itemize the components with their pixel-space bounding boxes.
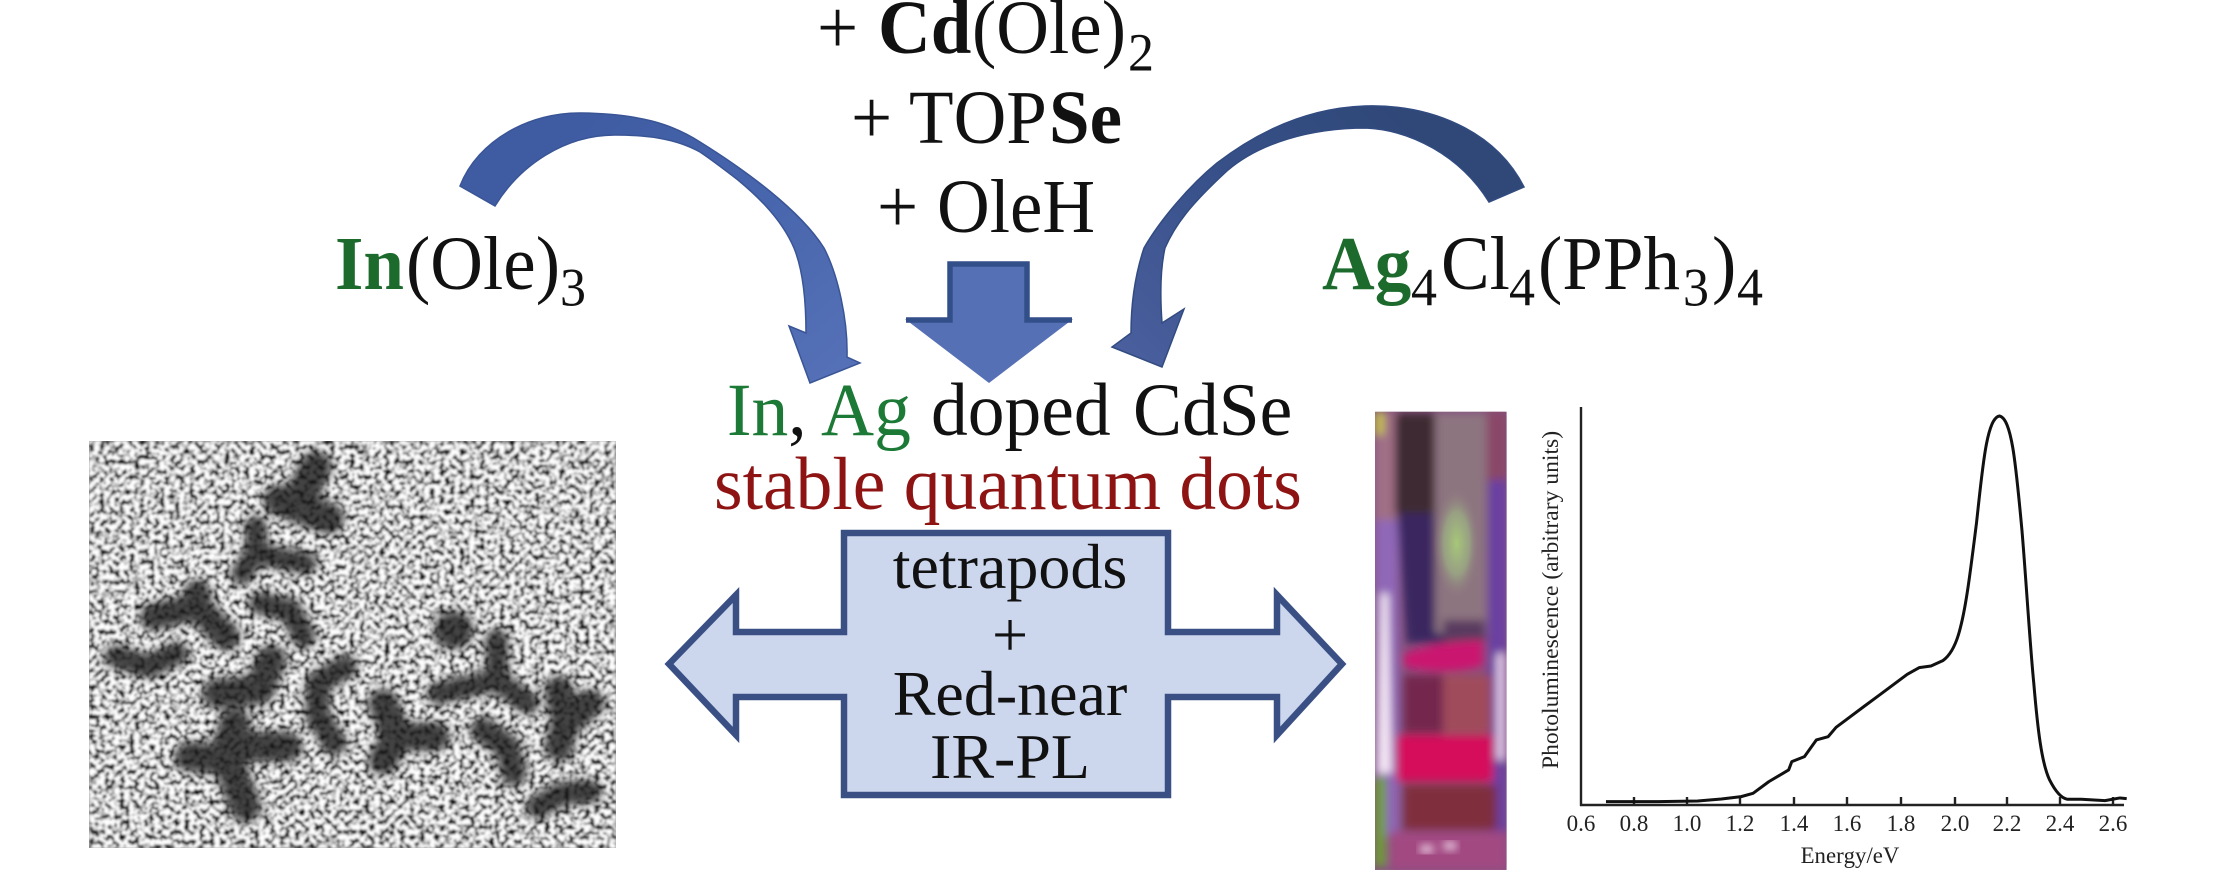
reagent: OleH: OleH — [937, 166, 1095, 249]
x tick labels: 1.8 — [1887, 811, 1915, 836]
reagent: TOPSe: TOP — [909, 77, 1047, 160]
text: Ag4Cl4(PPh3)4 precursor: ) — [1712, 223, 1736, 306]
reagent: TOPSe: + — [851, 77, 892, 160]
text: In(Ole)3 precursor: In — [335, 223, 404, 306]
text: In(Ole)3 precursor: (Ole) — [406, 223, 560, 306]
reagent: TOPSe: Se — [1049, 77, 1122, 160]
heading: doped CdSe: In — [727, 369, 788, 452]
spectrum curve — [1606, 416, 2127, 802]
callout text — [893, 531, 1127, 792]
reagent: Cd(Ole)2: 2 — [1128, 24, 1154, 83]
arrow: Ag4Cl4(PPh3)4 curved arrow — [1112, 106, 1524, 367]
x tick labels: 1.6 — [1833, 811, 1861, 836]
text: Ag4Cl4(PPh3)4 precursor: 4 — [1411, 259, 1437, 318]
y axis — [1580, 407, 1582, 806]
callout text: + — [992, 599, 1028, 670]
double arrow shape — [669, 533, 1342, 795]
callout text: IR-PL — [930, 721, 1090, 792]
panel: TEM micrograph of tetrapods — [89, 441, 616, 848]
text: Ag4Cl4(PPh3)4 precursor: 4 — [1509, 259, 1535, 318]
x tick labels: 1.4 — [1780, 811, 1809, 836]
x tick labels: 0.6 — [1567, 811, 1595, 836]
y axis title: Photoluminescence (arbitrary units) — [1538, 431, 1564, 769]
x tick labels: 0.8 — [1620, 811, 1648, 836]
callout text: tetrapods — [893, 531, 1127, 602]
heading: stable quantum dots: stable quantum dots — [714, 443, 1302, 526]
x tick labels: 2.0 — [1941, 811, 1969, 836]
arrow: In(Ole)3 curved arrow — [460, 113, 860, 383]
x tick labels: 2.6 — [2099, 811, 2127, 836]
heading: doped CdSe: Ag — [821, 369, 911, 452]
text: Ag4Cl4(PPh3)4 precursor: 4 — [1737, 259, 1763, 318]
x tick labels: 2.2 — [1993, 811, 2021, 836]
x tick labels: 1.0 — [1673, 811, 1701, 836]
text: Ag4Cl4(PPh3)4 precursor: Ag — [1322, 223, 1411, 306]
text: In(Ole)3 precursor: 3 — [560, 259, 586, 318]
x tick labels: 2.4 — [2046, 811, 2075, 836]
heading: doped CdSe: doped — [931, 369, 1111, 452]
x axis and ticks — [1580, 797, 2124, 805]
text: Ag4Cl4(PPh3)4 precursor: (PPh — [1538, 223, 1680, 306]
x tick labels — [1567, 811, 2127, 836]
reagent: OleH: + — [877, 166, 918, 249]
x axis title: Energy/eV — [1801, 843, 1900, 868]
text: Ag4Cl4(PPh3)4 precursor: 3 — [1683, 259, 1709, 318]
arrow: central reagent arrow — [905, 262, 1073, 383]
panel: cuvette photograph — [1375, 412, 1507, 870]
tetrapod clusters — [116, 467, 590, 807]
x tick labels: 1.2 — [1726, 811, 1754, 836]
heading: doped CdSe: CdSe — [1133, 369, 1292, 452]
callout text: Red-near — [893, 658, 1127, 729]
text: Ag4Cl4(PPh3)4 precursor: Cl — [1441, 223, 1510, 306]
text: added reagents — [817, 0, 1154, 249]
heading: doped CdSe: , — [788, 369, 807, 452]
callout: double-headed arrow box — [669, 531, 1342, 795]
green glow — [1436, 498, 1476, 588]
chart: photoluminescence spectrum — [1538, 407, 2127, 868]
